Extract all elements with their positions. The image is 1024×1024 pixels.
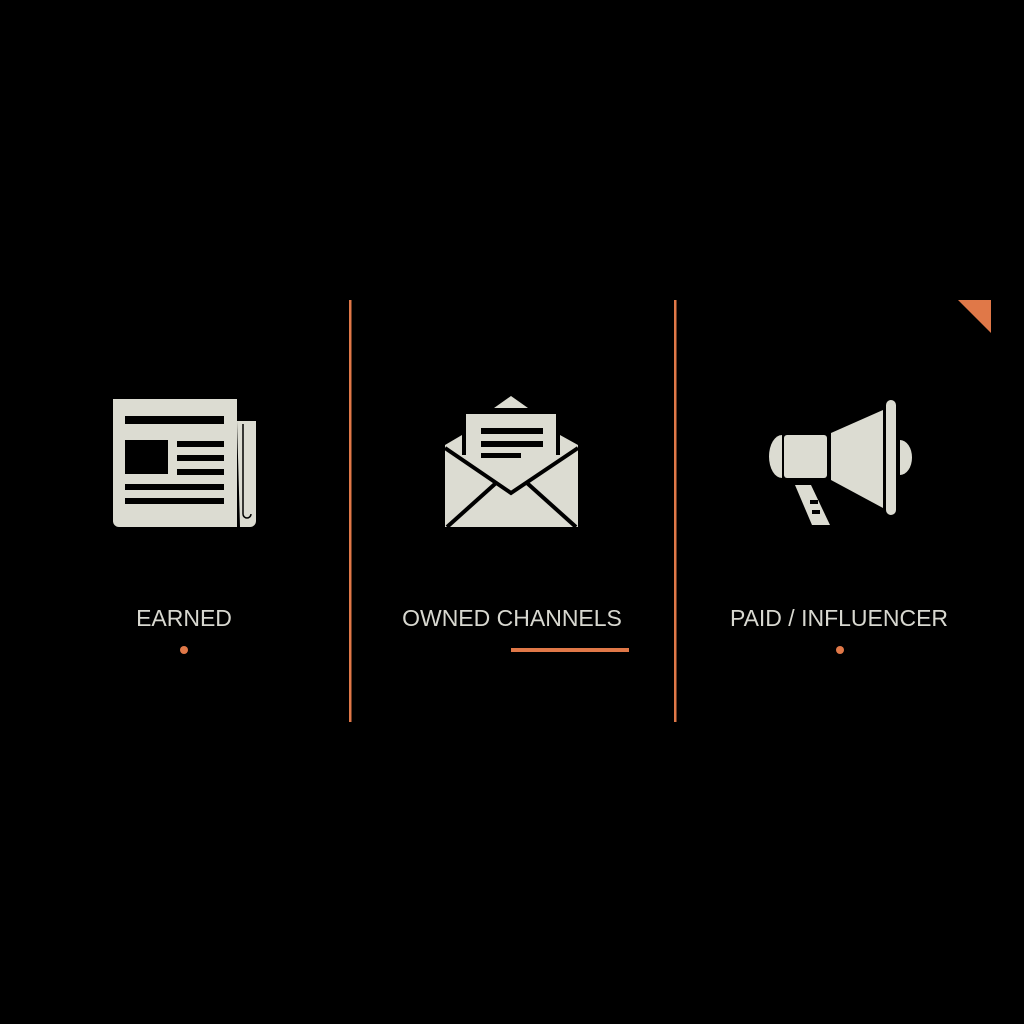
underline: owned: [511, 648, 629, 652]
icon: envelope: [445, 396, 578, 527]
icon: newspaper: [113, 399, 256, 527]
divider left: [349, 300, 352, 722]
icon: megaphone: [769, 400, 912, 525]
dot: paid: [836, 646, 844, 654]
dot: earned: [180, 646, 188, 654]
label: owned channels: OWNED CHANNELS: [402, 605, 622, 631]
corner accent triangle: [958, 300, 991, 333]
divider right: [674, 300, 676, 722]
label: paid / influencer: PAID / INFLUENCER: [730, 605, 948, 631]
label: earned: EARNED: [136, 605, 232, 631]
